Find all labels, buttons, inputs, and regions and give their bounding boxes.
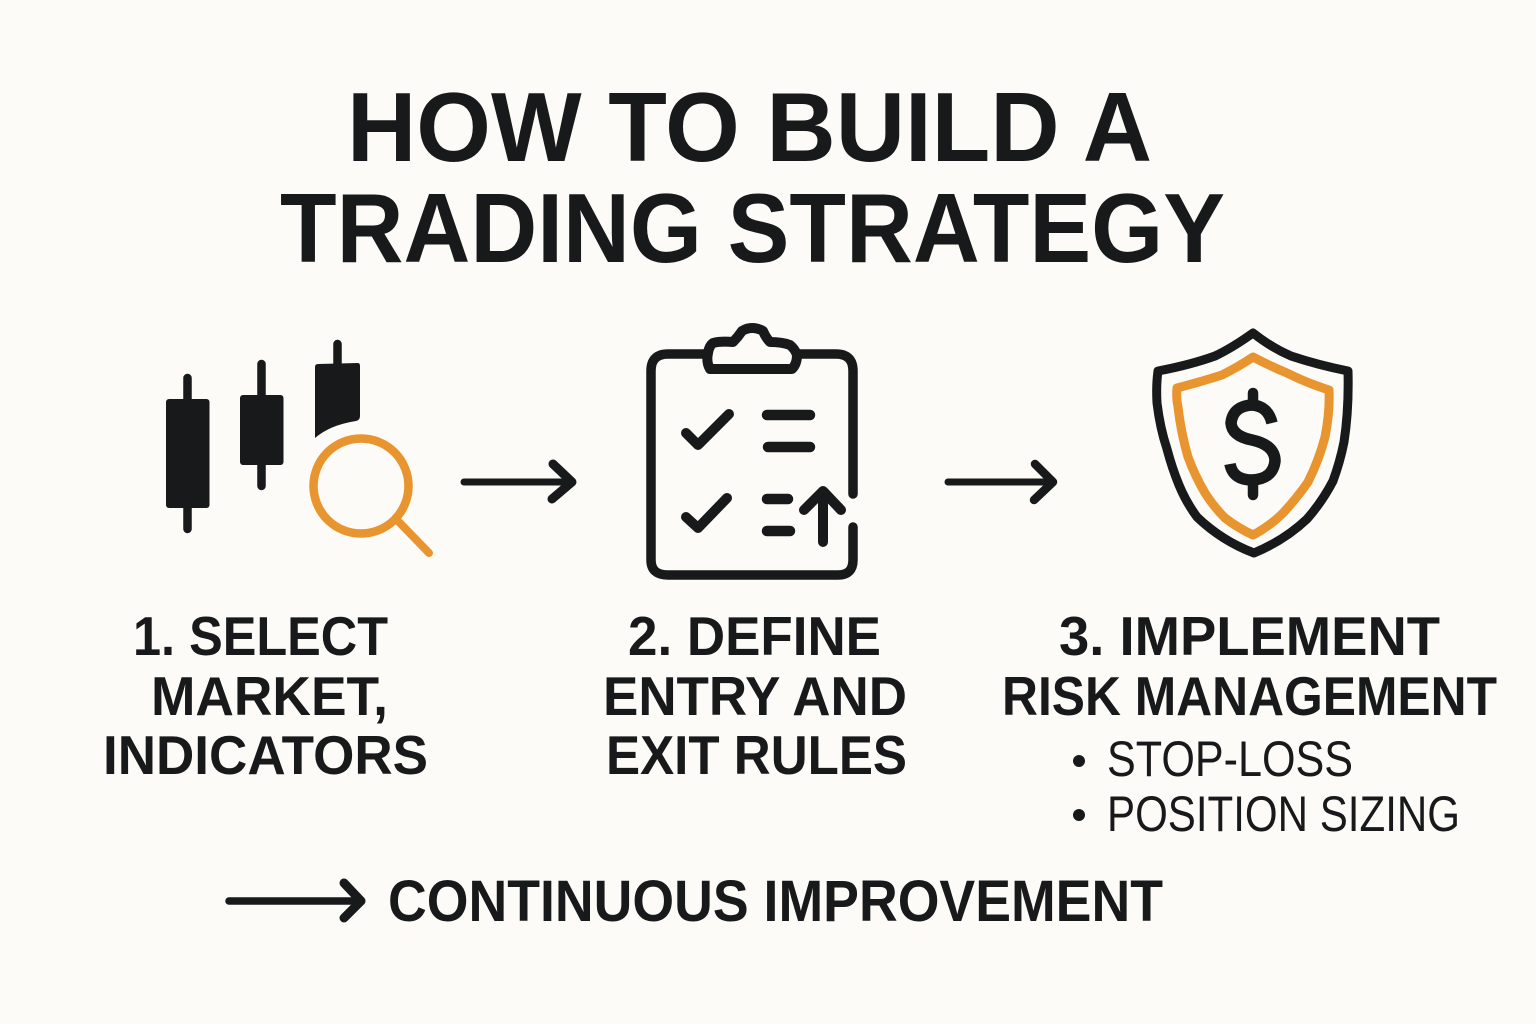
footer: continuous improvement [229, 869, 1163, 934]
icon: shield [1157, 333, 1348, 553]
step 1 label: 1. SELECT [133, 605, 388, 667]
icon: candlesticks [166, 344, 360, 529]
arrow: step 2 to step 3 [948, 464, 1053, 500]
panel: step 1 select market and indicators [103, 344, 429, 786]
title: TRADING STRATEGY [280, 173, 1225, 283]
icon: checklist marks [686, 414, 810, 531]
step 1 label [103, 605, 428, 786]
step 1 label: MARKET, [151, 665, 388, 727]
title: HOW TO BUILD A [347, 72, 1152, 182]
icon: dollar sign [1230, 393, 1275, 495]
arrow: continuous improvement [229, 883, 361, 918]
title [280, 72, 1225, 283]
step 2 label: EXIT RULES [606, 724, 907, 786]
icon: clipboard [651, 328, 853, 575]
step 2 label: 2. DEFINE [628, 605, 881, 667]
step 2 label: ENTRY AND [603, 665, 907, 727]
step 2 label [603, 605, 907, 786]
step 3 label [1002, 605, 1497, 727]
arrow: step 1 to step 2 [464, 464, 572, 499]
panel: step 2 define entry and exit rules [603, 328, 907, 786]
step 3 label: RISK MANAGEMENT [1002, 665, 1497, 727]
step 1 label: INDICATORS [103, 724, 428, 786]
icon: up arrow [804, 491, 841, 542]
step 3 label: 3. IMPLEMENT [1059, 605, 1440, 667]
continuous improvement text: CONTINUOUS IMPROVEMENT [388, 869, 1163, 934]
icon: magnifying glass [314, 438, 429, 553]
panel: step 3 implement risk management [1002, 333, 1497, 842]
bullet: stop-loss: STOP-LOSS [1107, 731, 1353, 787]
bullet: position sizing: POSITION SIZING [1107, 786, 1460, 842]
